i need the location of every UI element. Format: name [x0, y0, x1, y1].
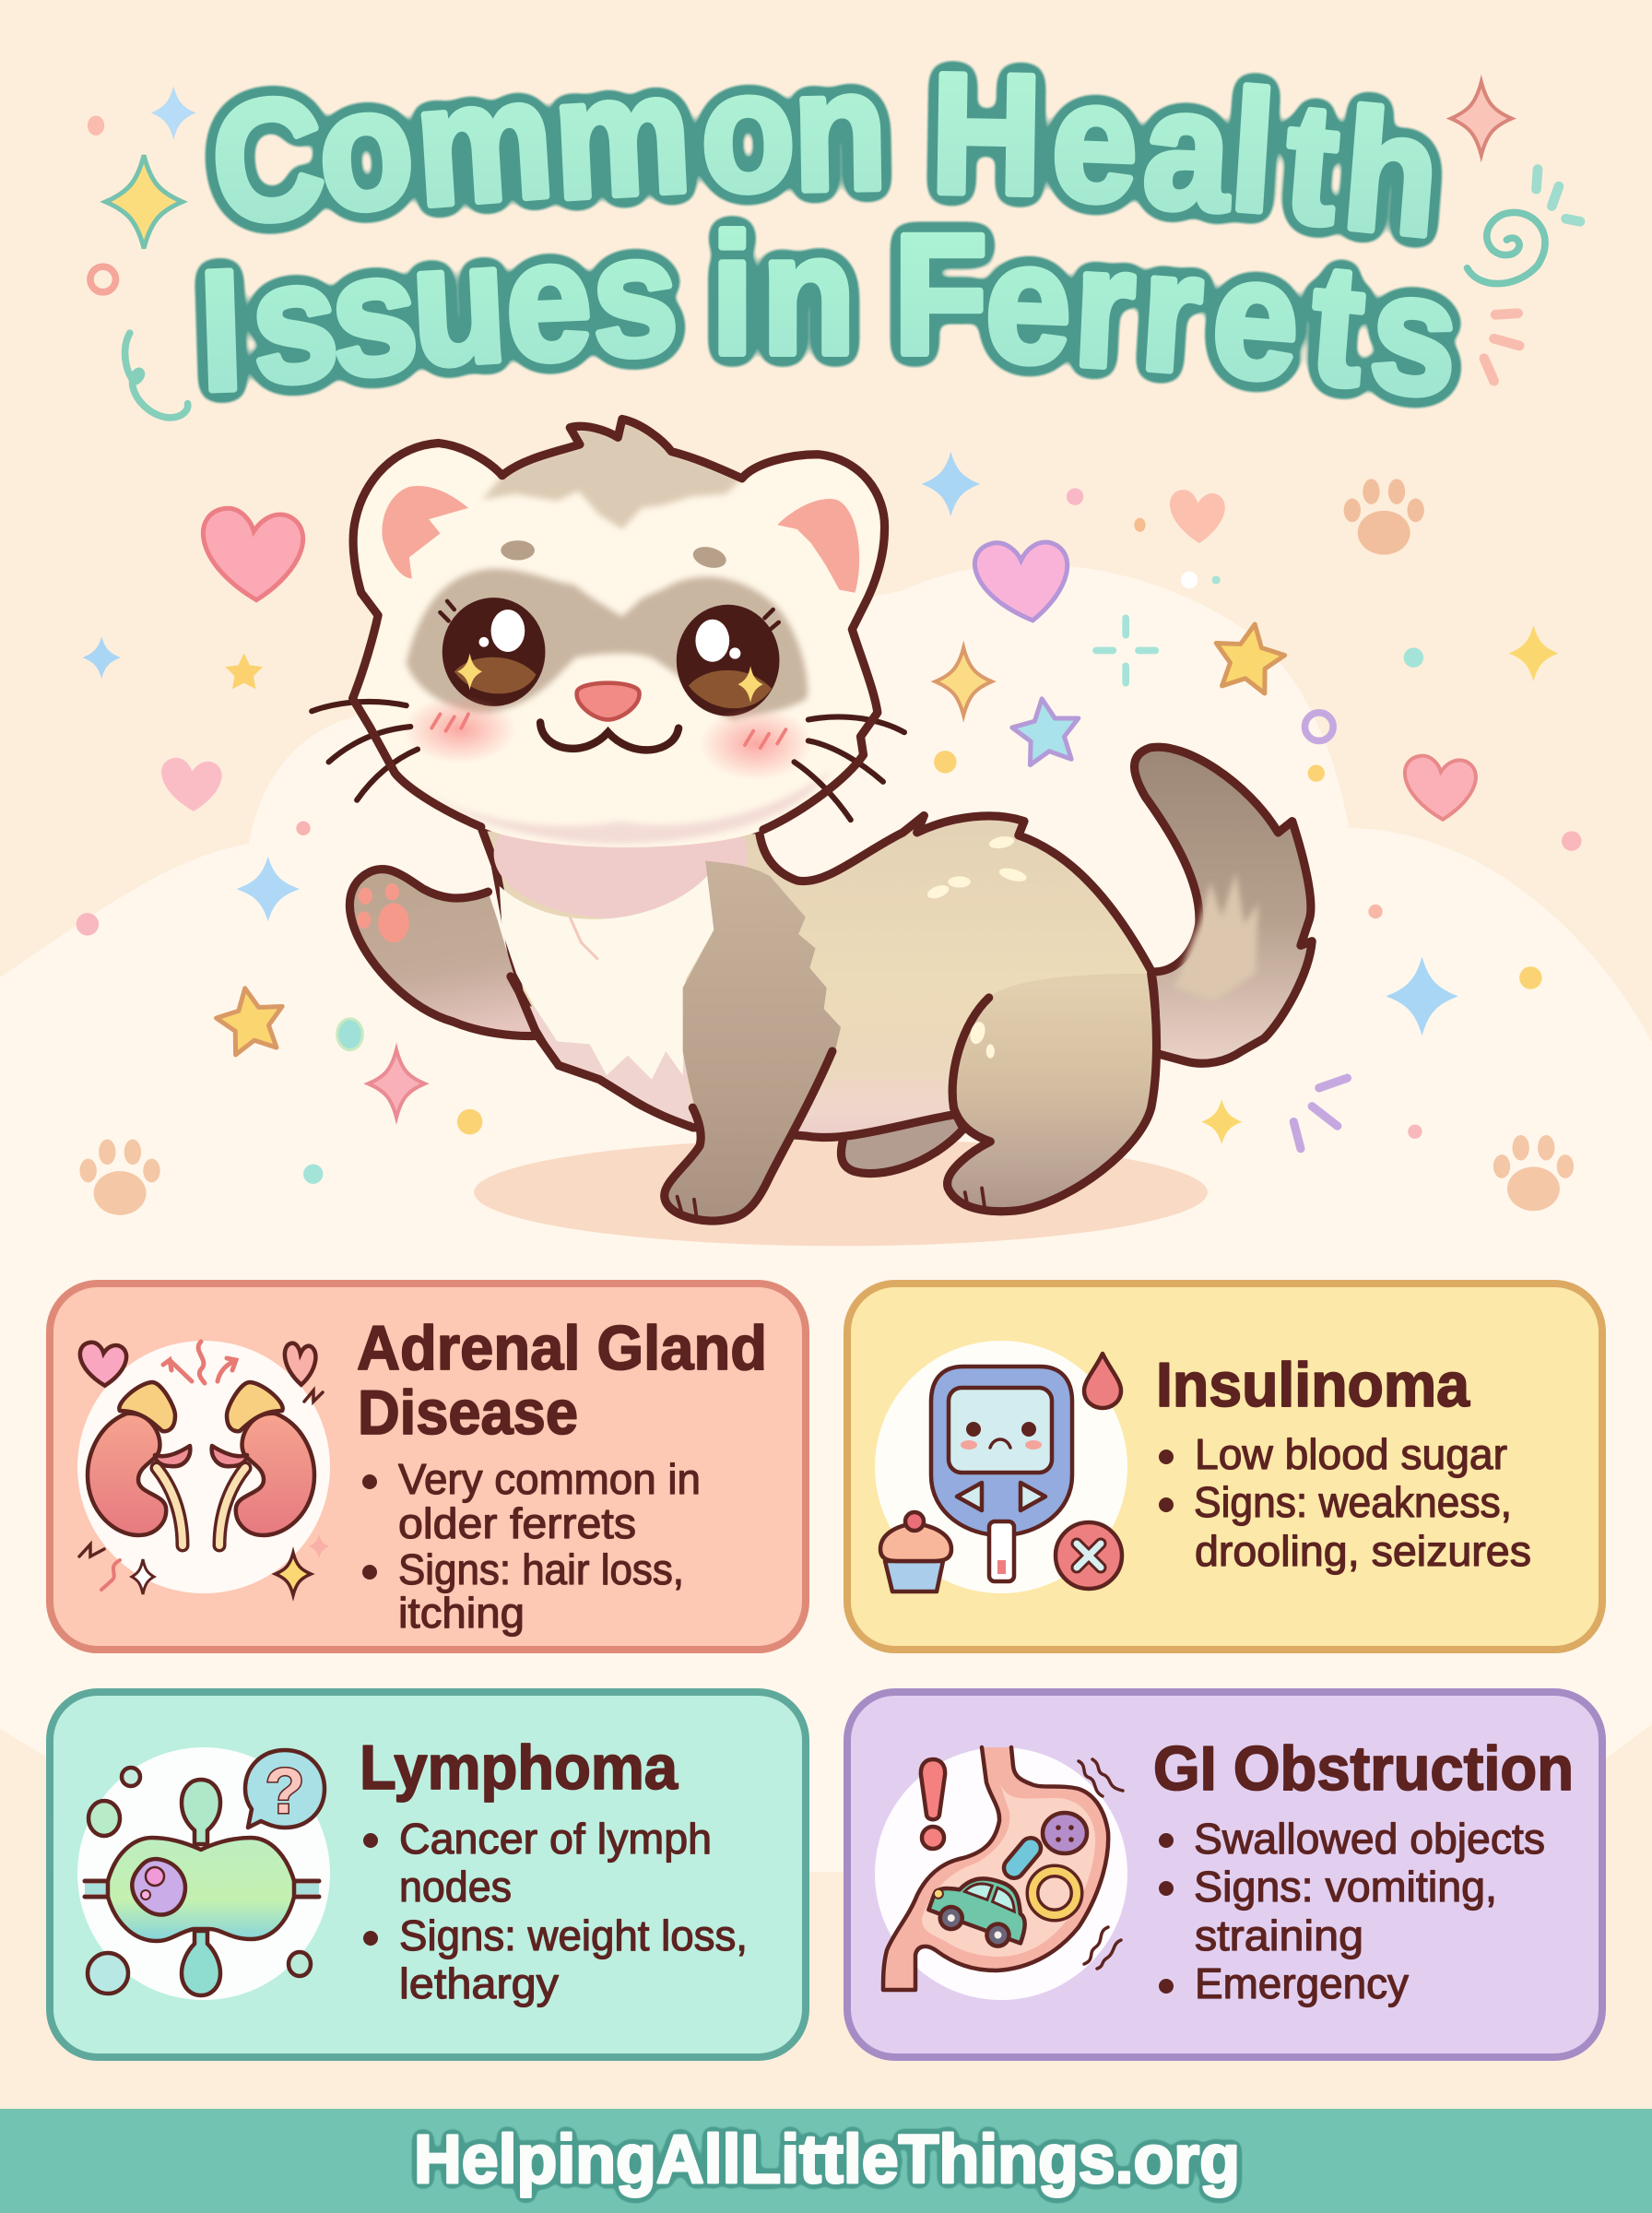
swirl right: [1468, 212, 1545, 284]
decorations around the title: [88, 82, 1580, 418]
heading: [357, 1313, 767, 1448]
star: [1209, 618, 1289, 695]
star: [212, 982, 289, 1057]
bullet list: [1159, 1815, 1545, 2007]
underbelly: [525, 1005, 690, 1123]
dot: [1134, 518, 1146, 532]
sparkle: [82, 636, 121, 679]
left kidney: [88, 1414, 166, 1535]
front leg outline: [665, 1051, 832, 1221]
sparkle: [922, 452, 980, 516]
toes: [678, 1197, 697, 1219]
panel: Insulinoma: [847, 1284, 1602, 1650]
ground shadow: [474, 1139, 1208, 1246]
x badge: [1056, 1522, 1122, 1589]
sparkle pink: [1451, 82, 1512, 155]
test strip: [989, 1521, 1014, 1581]
bullet list: Signs: weight loss,: [399, 1911, 748, 1959]
rays: [1536, 170, 1580, 221]
dot: [1212, 575, 1221, 585]
head: [312, 419, 904, 847]
thigh highlights: [968, 1020, 995, 1059]
dot: [1067, 488, 1083, 505]
swirl left: [125, 333, 188, 418]
front leg and shoulder: [665, 860, 841, 1221]
body: [481, 788, 1156, 1138]
pill: [1000, 1834, 1044, 1882]
dot: [1519, 966, 1542, 989]
dot: [296, 822, 311, 835]
body highlights: [926, 834, 1028, 901]
panel: Lymphoma: [50, 1692, 806, 2057]
blush right: [700, 707, 812, 780]
heart: [1405, 756, 1476, 820]
bullet list: Emergency: [1195, 1959, 1409, 2007]
ear left inner: [383, 486, 468, 578]
star: [225, 654, 263, 689]
bullet list: Signs: hair loss,: [398, 1545, 684, 1593]
nuclei: [146, 1867, 164, 1886]
sparkle: [368, 1050, 425, 1118]
mouth: [540, 723, 678, 750]
vessels: [155, 1446, 190, 1466]
icon: white circle: [875, 1747, 1127, 2000]
dot: [1308, 764, 1325, 782]
footer bar: [0, 2109, 1652, 2213]
blush left: [404, 695, 516, 763]
ring: [90, 266, 115, 292]
icon: stomach: [883, 1747, 1123, 1990]
arm: [349, 870, 537, 1036]
dots: [1181, 572, 1198, 588]
sad face: [966, 1422, 981, 1437]
bullet list: [362, 1455, 701, 1637]
bullet list: Very common in: [398, 1455, 701, 1503]
sparkle: [1201, 1099, 1242, 1144]
panel: Adrenal Gland Disease: [50, 1284, 806, 1650]
dot: [1368, 905, 1383, 918]
left adrenal: [119, 1382, 175, 1431]
sparkle: [936, 647, 992, 716]
heading: Lymphoma: [360, 1733, 678, 1803]
dot: [457, 1109, 482, 1134]
eye left: [440, 599, 543, 704]
title line 1: Common Health: [206, 35, 1446, 273]
heading: Adrenal Gland: [357, 1313, 767, 1383]
face mask: [407, 569, 808, 719]
zigzags: [79, 1391, 323, 1556]
bullet list: drooling, seizures: [1195, 1527, 1531, 1575]
paw: [79, 1140, 160, 1215]
background cloud: [0, 564, 1652, 1872]
bullet list: Signs: vomiting,: [1194, 1863, 1497, 1911]
stomach lining: [922, 1784, 1095, 1957]
paw: [1344, 479, 1424, 555]
left ureter: [157, 1468, 183, 1545]
arrows: [163, 1342, 236, 1383]
ring: [1305, 713, 1333, 740]
exclamation: [921, 1759, 945, 1819]
brow spots: [501, 540, 535, 561]
neck shadow: [494, 788, 748, 918]
card background: [50, 1284, 806, 1650]
blood drop: [1084, 1354, 1121, 1408]
question mark: ?: [266, 1755, 304, 1827]
whiskers: [312, 702, 904, 820]
torso: [481, 816, 1156, 1138]
buttons: [957, 1483, 982, 1510]
dashes: [1484, 314, 1519, 381]
sparkle yellow: [105, 155, 183, 248]
icon: glucose meter: [880, 1354, 1122, 1592]
chest edge: [511, 976, 692, 1128]
dot: [77, 913, 99, 936]
cell: [132, 1859, 185, 1915]
bubbles: [122, 1768, 140, 1786]
dot: [1562, 831, 1581, 851]
button: [1043, 1813, 1087, 1853]
heading: Insulinoma: [1156, 1350, 1470, 1420]
dot: [1404, 647, 1423, 668]
egg: [337, 1019, 362, 1050]
stomach: [883, 1747, 1108, 1990]
nose: [577, 683, 640, 719]
sparkles: [132, 1559, 154, 1594]
panel: GI Obstruction: [847, 1692, 1602, 2057]
icon: white circle: [875, 1341, 1127, 1593]
far back leg: [841, 1094, 963, 1174]
back thigh: [948, 974, 1157, 1212]
head outline: [353, 419, 885, 830]
blush lines: [431, 714, 785, 748]
heading: GI Obstruction: [1153, 1734, 1574, 1804]
card background: [50, 1692, 806, 2057]
sparkle: [1509, 625, 1558, 681]
right ureter: [219, 1468, 245, 1545]
bullet list: older ferrets: [398, 1499, 636, 1547]
paw pads: [357, 883, 409, 942]
sparkle blue: [151, 86, 196, 139]
node: [108, 1838, 294, 1941]
toy car: [924, 1862, 1038, 1954]
cupcake: [880, 1512, 951, 1592]
heart: [1170, 490, 1225, 543]
icon: white circle: [77, 1747, 330, 2000]
bottom bulb: [182, 1931, 220, 1995]
dot: [303, 1164, 323, 1184]
eye right: [678, 607, 779, 714]
icon: kidneys: [79, 1342, 329, 1595]
sparkle: [1386, 957, 1458, 1035]
arm outline: [349, 870, 537, 1036]
right adrenal: [227, 1382, 283, 1431]
purple dashes: [1293, 1078, 1347, 1149]
bullet list: lethargy: [399, 1959, 559, 2007]
dot: [1408, 1125, 1422, 1139]
hearts: [80, 1343, 126, 1386]
ear right inner: [777, 499, 859, 593]
card background: [847, 1692, 1602, 2057]
bullet list: Signs: weakness,: [1194, 1478, 1512, 1526]
sparkle: [236, 857, 300, 921]
tail fur: [1174, 872, 1258, 1002]
bullet list: Cancer of lymph: [399, 1815, 712, 1863]
speech bubble: [245, 1750, 324, 1828]
squiggles: [1079, 1759, 1123, 1969]
bullet list: [1159, 1430, 1531, 1575]
star blue: [1009, 694, 1084, 767]
title: [196, 35, 1464, 433]
meter body: [931, 1367, 1072, 1535]
ring: [1032, 1871, 1077, 1915]
bullet list: [363, 1815, 748, 2007]
top bulb: [182, 1780, 220, 1844]
cross sparkle: [1096, 618, 1155, 683]
dot: [934, 751, 957, 774]
screen: [949, 1388, 1052, 1473]
heart purple: [972, 534, 1075, 627]
back thigh outline: [948, 974, 1157, 1212]
right kidney: [236, 1414, 314, 1535]
card background: [847, 1284, 1602, 1650]
bullet list: straining: [1195, 1911, 1363, 1959]
decorations around the ferret: [77, 452, 1581, 1215]
bullet list: itching: [398, 1589, 525, 1637]
chin shadow: [402, 769, 832, 844]
forehead patch: [482, 419, 742, 529]
heart small: [161, 758, 222, 811]
chest fur: [500, 875, 714, 1080]
bullet list: nodes: [399, 1863, 512, 1911]
vessels: [85, 1881, 319, 1897]
heading: Disease: [358, 1378, 578, 1448]
head shape: [353, 419, 885, 847]
dot: [88, 115, 104, 136]
icon: lymph node: [85, 1750, 324, 1995]
footer text: HelpingAllLittleThings.org: [414, 2121, 1240, 2197]
chest tuft: [570, 917, 598, 960]
paw: [1493, 1135, 1574, 1211]
back toes: [965, 1189, 985, 1208]
title line 2: Issues in Ferrets: [196, 199, 1464, 433]
ferret illustration: [312, 419, 1312, 1246]
bullet list: Low blood sugar: [1195, 1430, 1507, 1478]
bullet list: Swallowed objects: [1194, 1815, 1545, 1863]
tail: [1135, 747, 1312, 1063]
heart pink large: [203, 508, 303, 600]
icon: white circle: [77, 1341, 330, 1593]
